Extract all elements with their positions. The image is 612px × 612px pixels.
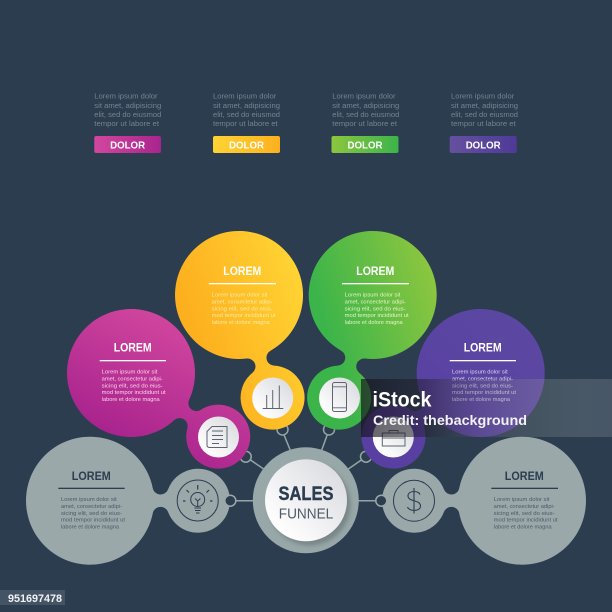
text block: grey left: Lorem ipsum dolor sit [61, 497, 117, 503]
text block: purple: Lorem ipsum dolor sit [452, 369, 508, 375]
legend text: green: elit, sed do eiusmod [332, 112, 399, 119]
legend text: yellow: elit, sed do eiusmod [213, 112, 280, 119]
text block: grey left: amet, consectetur adipi- [61, 504, 122, 510]
text block: purple [452, 369, 516, 403]
text block: magenta: mod tempor incididunt ut [102, 390, 166, 396]
text block: green: amet, consectetur adipi- [345, 299, 406, 305]
text block: green: Lorem ipsum dolor sit [345, 292, 401, 298]
text block: yellow: mod tempor incididunt ut [212, 313, 276, 319]
legend text: green: tempor ut labore et [332, 121, 397, 128]
heading: yellow: LOREM [223, 266, 261, 278]
node: right [376, 495, 387, 506]
heading: magenta: LOREM [114, 343, 152, 355]
panel: yellow bubble [175, 231, 305, 430]
panel: green bubble [307, 231, 437, 430]
legend text: yellow: sit amet, adipisicing [213, 103, 280, 110]
text block: green: mod tempor incididunt ut [345, 313, 409, 319]
text block: grey right: mod tempor incididunt ut [494, 518, 558, 524]
text block: magenta: Lorem ipsum dolor sit [102, 369, 158, 375]
text block: purple: amet, consectetur adipi- [452, 376, 513, 382]
legend button: purple: DOLOR [466, 139, 501, 151]
watermark logo: iStock [372, 389, 432, 412]
legend text: magenta [94, 94, 161, 128]
legend text: purple: tempor ut labore et [451, 121, 516, 128]
hub: sales funnel [253, 447, 359, 553]
icon: bar chart [252, 378, 293, 418]
legend text: purple [451, 94, 518, 128]
connectors from hub to nodes [230, 424, 381, 501]
legend text: yellow: Lorem ipsum dolor [213, 94, 277, 100]
text block: yellow: sicing elit, sed do eius- [212, 306, 273, 312]
legend text: magenta: Lorem ipsum dolor [94, 94, 158, 100]
heading: grey left: LOREM [72, 471, 111, 483]
text block: grey right: Lorem ipsum dolor sit [494, 497, 550, 503]
text block: grey right: sicing elit, sed do eius- [494, 511, 555, 517]
panel: grey right bubble [382, 437, 586, 565]
text block: purple: labore et dolore magna [452, 397, 511, 403]
text block: green: labore et dolore magna [345, 320, 404, 326]
heading: grey right: LOREM [505, 471, 544, 483]
legend item: magenta [94, 94, 161, 153]
text block: grey right [494, 497, 558, 531]
text block: grey left: sicing elit, sed do eius- [61, 511, 122, 517]
text block: yellow [212, 292, 276, 326]
watermark credit: Credit: thebackground [373, 412, 527, 428]
legend button: magenta: DOLOR [110, 139, 145, 151]
panel: grey left bubble [26, 437, 230, 565]
text block: grey left: labore et dolore magna [61, 525, 120, 531]
text block: green: sicing elit, sed do eius- [345, 306, 406, 312]
image id tag: 951697478 [8, 593, 62, 605]
watermark band [361, 379, 612, 437]
hub subtitle: FUNNEL [279, 505, 333, 522]
legend text: magenta: elit, sed do eiusmod [94, 112, 161, 119]
hub title: SALES [278, 484, 334, 505]
legend text: purple: Lorem ipsum dolor [451, 94, 515, 100]
text block: magenta: sicing elit, sed do eius- [102, 383, 163, 389]
panel: purple bubble [361, 309, 545, 469]
legend text: yellow: tempor ut labore et [213, 121, 278, 128]
panel: magenta bubble [67, 309, 250, 469]
text block: green [345, 292, 409, 326]
text block: purple: sicing elit, sed do eius- [452, 383, 513, 389]
icon: light bulb [177, 480, 218, 521]
text block: purple: mod tempor incididunt ut [452, 390, 516, 396]
legend text: magenta: tempor ut labore et [94, 121, 159, 128]
heading: purple: LOREM [464, 343, 502, 355]
text block: yellow: labore et dolore magna [212, 320, 271, 326]
text block: grey right: labore et dolore magna [494, 525, 553, 531]
text block: magenta: labore et dolore magna [102, 397, 161, 403]
icon: dollar [394, 480, 434, 521]
text block: magenta [102, 369, 166, 403]
legend text: purple: elit, sed do eiusmod [451, 112, 518, 119]
image id tag [0, 590, 65, 605]
icon: briefcase [373, 416, 414, 458]
icon: document [198, 416, 239, 458]
icon: phone [319, 378, 360, 418]
heading: green: LOREM [356, 266, 394, 278]
legend text: magenta: sit amet, adipisicing [94, 103, 161, 110]
text block: grey left [61, 497, 125, 531]
legend text: green: Lorem ipsum dolor [332, 94, 396, 100]
legend button: green: DOLOR [348, 139, 383, 151]
text block: magenta: amet, consectetur adipi- [102, 376, 163, 382]
text block: grey right: amet, consectetur adipi- [494, 504, 555, 510]
legend text: yellow [213, 94, 280, 128]
legend text: purple: sit amet, adipisicing [451, 103, 518, 110]
legend button: yellow: DOLOR [229, 139, 264, 151]
text block: yellow: Lorem ipsum dolor sit [212, 292, 268, 298]
legend item: yellow [213, 94, 280, 153]
node: left [225, 495, 236, 506]
legend text: green [332, 94, 399, 128]
legend text: green: sit amet, adipisicing [332, 103, 399, 110]
text block: grey left: mod tempor incididunt ut [61, 518, 125, 524]
legend item: purple [450, 94, 518, 153]
legend item: green [332, 94, 399, 153]
text block: yellow: amet, consectetur adipi- [212, 299, 273, 305]
